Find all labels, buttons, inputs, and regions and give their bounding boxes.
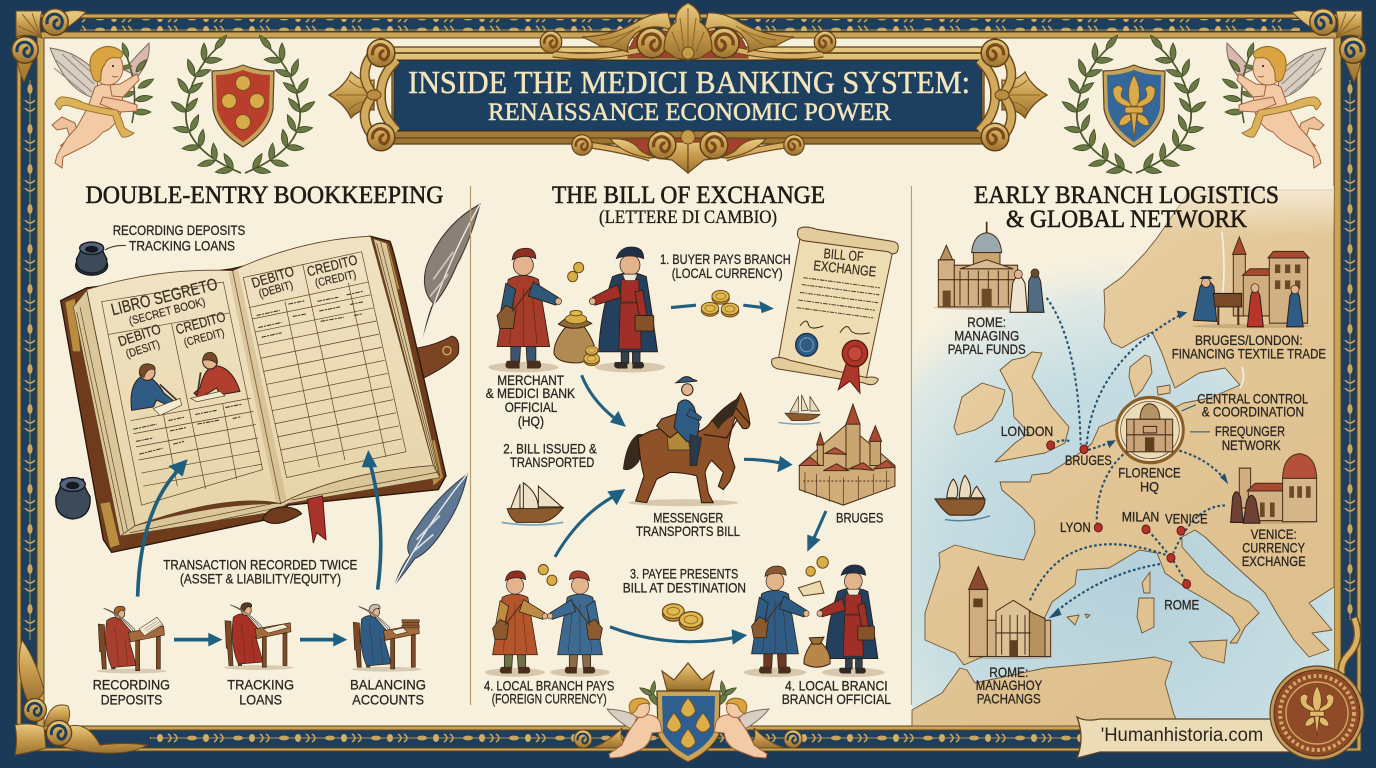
ornament: bottom cartouche [572, 130, 804, 173]
icon: desk recording deposits [97, 606, 167, 673]
icon: falling coins [538, 564, 557, 585]
icon: coins above handoff [806, 557, 828, 576]
city markers [1047, 441, 1191, 588]
bill title text: BILL OF [823, 245, 864, 264]
label: transaction recorded twice [163, 557, 357, 586]
label: bill issued and transported: 2. BILL ISSUED & [503, 440, 597, 456]
label: Rome on map: ROME [1164, 596, 1199, 612]
label: Rome managhoy pachangs: ROME: [989, 664, 1028, 680]
icon: Spanish church [967, 567, 1053, 659]
ledger table left page [102, 282, 263, 505]
ledger table right page [243, 252, 406, 478]
ledger page headings: (DESIT) [125, 339, 162, 361]
label: bill issued and transported [503, 440, 597, 470]
label: Rome managhoy pachangs: MANAGHOY [976, 677, 1043, 693]
label: Venice currency exchange [1242, 526, 1306, 569]
leader lines [1182, 405, 1210, 432]
right crest cherub [714, 698, 769, 758]
label: balancing accounts step [350, 677, 426, 708]
panel: double-entry bookkeeping [56, 182, 480, 708]
panel: branch logistics map [912, 182, 1334, 726]
banner: Humanhistoria.com: 'Humanhistoria.com [1101, 725, 1263, 746]
label: balancing accounts step: BALANCING [350, 677, 426, 693]
icon: blue scribe in ledger [131, 364, 182, 416]
Denmark [1129, 355, 1170, 397]
palm fronds [638, 680, 738, 706]
title text [408, 64, 970, 126]
label: payee presents bill: 3. PAYEE PRESENTS [630, 566, 738, 582]
label: messenger transports bill: MESSENGER [653, 509, 723, 525]
left crest cherub [607, 698, 662, 758]
crest: Medici red shield with laurel [170, 33, 316, 175]
label: Bruges London textile trade [1172, 332, 1326, 362]
label: recording deposits, tracking loans [113, 222, 245, 254]
illustration: open ledger with ink and quills [56, 204, 480, 673]
top fade into parchment [912, 186, 1334, 236]
label: Bruges London textile trade: FINANCING TEXTILE TRADE [1172, 346, 1326, 362]
icon: Florence HQ medallion [1117, 397, 1183, 463]
label: Florence HQ: HQ [1140, 479, 1159, 495]
label: balancing accounts step: ACCOUNTS [352, 692, 424, 708]
icon: two coins [662, 604, 703, 630]
icon: coin sack [554, 310, 599, 366]
figure: branch official [817, 565, 885, 677]
ledger page headings: DEBITO [249, 263, 296, 291]
label: local branch pays: 4. LOCAL BRANCH PAYS [484, 677, 614, 693]
Ireland [954, 383, 1005, 435]
shield drops [667, 698, 710, 748]
seal: wax fleur-de-lis medallion [1270, 666, 1364, 760]
label: payee presents bill: BILL AT DESTINATION [623, 579, 746, 595]
arrow: messenger to Bruges [744, 459, 783, 463]
ledger page headings: (CREDIT) [314, 269, 358, 290]
label: Rome managing papal funds: PAPAL FUNDS [948, 341, 1026, 357]
sea [912, 190, 1334, 726]
label: frequnger network: NETWORK [1222, 437, 1281, 453]
left page [87, 270, 281, 526]
label: Rome managing papal funds: ROME: [967, 314, 1006, 330]
map base: sea and landmasses [912, 186, 1334, 726]
label: merchant and Medici bank official: & MEDICI BANK [486, 385, 576, 401]
arrows: flow into ledger [138, 463, 381, 640]
figure: messenger on horseback [623, 377, 750, 506]
label: buyer pays branch: 1. BUYER PAYS BRANCH [660, 251, 791, 267]
bill title text [813, 245, 877, 280]
label: Venice currency exchange: CURRENCY [1242, 540, 1306, 556]
dotted routes [1030, 298, 1225, 611]
icon: ship at sea [502, 483, 563, 525]
label: recording deposits, tracking loans: TRACKING LOANS [129, 238, 235, 254]
icon: lower inkwell [56, 478, 90, 519]
title text: INSIDE THE MEDICI BANKING SYSTEM: [408, 64, 970, 100]
label: Florence HQ: FLORENCE [1118, 464, 1181, 480]
label: transaction recorded twice: (ASSET & LIABILITY/EQUITY) [180, 570, 341, 586]
icon: bill of exchange scroll [772, 227, 898, 393]
label: tracking loans step: TRACKING [227, 677, 294, 693]
label: buyer pays branch: (LOCAL CURRENCY) [672, 265, 783, 281]
route arrowheads [1048, 311, 1228, 618]
label: tracking loans step [227, 677, 294, 708]
ledger page headings: CREDITO [174, 308, 227, 337]
label: Lyon: LYON [1060, 519, 1091, 535]
label: transaction recorded twice: TRANSACTION RECORDED TWICE [163, 557, 357, 573]
title text: RENAISSANCE ECONOMIC POWER [488, 99, 891, 126]
label: central control: CENTRAL CONTROL [1197, 391, 1308, 407]
arrow: merchant to messenger [582, 375, 620, 422]
heading: branch logistics [974, 182, 1279, 233]
arrow: local branch to messenger [555, 495, 617, 557]
label: central control: & COORDINATION [1202, 404, 1304, 420]
label: messenger transports bill: TRANSPORTS BILL [636, 523, 740, 539]
icon: small ship [778, 395, 820, 424]
arrowheads [168, 450, 377, 647]
icon: right cherub with olive branch [1221, 42, 1326, 168]
label: bill issued and transported: TRANSPORTED [510, 454, 594, 470]
icon: desk balancing accounts [352, 604, 422, 672]
arrow: Bruges to official [813, 511, 826, 540]
icon: gold coins pile [701, 290, 739, 317]
ledger page headings: DEBITO [116, 321, 163, 349]
Britain [995, 352, 1069, 462]
islands [1067, 572, 1227, 663]
label: Rome managhoy pachangs [976, 664, 1043, 707]
band scrolls [574, 728, 802, 748]
label: buyer pays branch [660, 251, 791, 281]
figure: payee presenting bill [744, 566, 809, 677]
label: Bruges: BRUGES [836, 509, 883, 525]
icon: map ship [935, 475, 990, 521]
label: merchant and Medici bank official: MERCHANT [497, 372, 564, 388]
page stacks [73, 290, 135, 536]
label: Venice currency exchange: VENICE: [1251, 526, 1297, 542]
label: merchant and Medici bank official: (HQ) [518, 413, 544, 429]
label: Rome managing papal funds [948, 314, 1026, 357]
label: tracking loans step: LOANS [239, 692, 282, 708]
label: Bruges London textile trade: BRUGES/LONDON: [1195, 332, 1303, 348]
label: recording deposits, tracking loans: RECORDING DEPOSITS [113, 222, 245, 238]
label: Rome managhoy pachangs: PACHANGS [977, 691, 1041, 707]
ledger page headings: (CREDIT) [183, 327, 226, 349]
crest: blue fleur-de-lis shield with laurel [1061, 33, 1207, 175]
label: Rome managing papal funds: MANAGING [954, 328, 1019, 344]
label: frequnger network [1215, 423, 1285, 453]
icon: Bruges London textile scene [1192, 237, 1312, 328]
heading: bill of exchange: THE BILL OF EXCHANGE [552, 182, 825, 209]
icon: money bag [804, 637, 830, 667]
heading: double-entry bookkeeping: DOUBLE-ENTRY BOOKKEEPING [86, 182, 444, 209]
figure: local branch clerk [547, 571, 610, 677]
plaque gold bars and navy field [329, 39, 1047, 151]
label: London: LONDON [1001, 423, 1053, 439]
icon: handed bill [798, 581, 824, 596]
illustration: bill of exchange flow [485, 227, 898, 677]
panel: bill of exchange [484, 182, 898, 707]
icon: red scribe in ledger [191, 352, 240, 402]
label: recording deposits step: RECORDING [93, 677, 170, 693]
ledger page headings: CREDITO [305, 251, 359, 279]
label: local branch official [782, 677, 891, 707]
figure: local merchant [485, 571, 548, 677]
icon: Rome basilica and figures [933, 222, 1044, 312]
North Africa [912, 657, 1180, 726]
label: Venice currency exchange: EXCHANGE [1242, 553, 1306, 569]
label: Florence HQ [1118, 464, 1181, 495]
heading: branch logistics: & GLOBAL NETWORK [1006, 206, 1247, 233]
label: Milan: MILAN [1122, 509, 1159, 525]
icon: Bruges town [799, 404, 895, 505]
right page [233, 236, 433, 503]
header: title plaque [329, 3, 1047, 173]
Scandinavia and continental Europe with Italy [925, 190, 1334, 665]
crown [662, 663, 714, 690]
banner: Humanhistoria.com [1077, 717, 1290, 758]
label: local branch pays: (FOREIGN CURRENCY) [492, 690, 607, 706]
heading: bill of exchange: (LETTERE DI CAMBIO) [599, 207, 777, 228]
icon: left cherub with olive branch [50, 42, 155, 168]
label: merchant and Medici bank official: OFFICIAL [505, 399, 557, 415]
ledger page headings: (DEBIT) [258, 279, 295, 300]
label: local branch official: 4. LOCAL BRANCI [785, 677, 888, 693]
label: recording deposits step: DEPOSITS [101, 692, 162, 708]
ledger page headings [109, 251, 359, 361]
shield [657, 691, 720, 762]
icon: desk tracking loans [223, 603, 293, 670]
label: frequnger network: FREQUNGER [1215, 423, 1285, 439]
ledger page headings: (SECRET BOOK) [128, 296, 207, 328]
ledger page headings: LIBRO SEGRETO [109, 275, 219, 319]
ornament: top cartouche [540, 3, 836, 60]
label: merchant and Medici bank official [486, 372, 576, 429]
bill title text: EXCHANGE [813, 257, 877, 280]
icon: upper quill [423, 204, 480, 338]
strap clasp [417, 336, 459, 378]
bookmark and clasp [307, 496, 326, 543]
arrow: local branch to destination [610, 627, 737, 642]
label: central control [1197, 391, 1308, 420]
label: payee presents bill [623, 566, 746, 595]
icon: top inkwell [76, 242, 126, 275]
crest: bottom royal shield with crown and cherubs [574, 663, 802, 762]
label: Bruges on map: BRUGES [1065, 452, 1112, 468]
label: local branch official: BRANCH OFFICIAL [782, 691, 891, 707]
heading: bill of exchange [552, 182, 825, 228]
figure: merchant with satchel [488, 248, 562, 372]
icon: coins in the air [568, 262, 584, 282]
label: messenger transports bill [636, 509, 740, 539]
icon: Venice domed building [1228, 454, 1318, 524]
handwritten entries [133, 291, 364, 454]
figure: Medici bank official [589, 247, 665, 372]
label: local branch pays [484, 677, 614, 706]
book cover [61, 236, 446, 552]
heading: branch logistics: EARLY BRANCH LOGISTICS [974, 182, 1279, 209]
icon: lower quill [395, 474, 467, 584]
map art and routes [933, 222, 1318, 659]
arrow: coins to bill [671, 305, 763, 308]
label: Venice on map: VENICE [1165, 511, 1208, 527]
label: recording deposits step [93, 677, 170, 708]
